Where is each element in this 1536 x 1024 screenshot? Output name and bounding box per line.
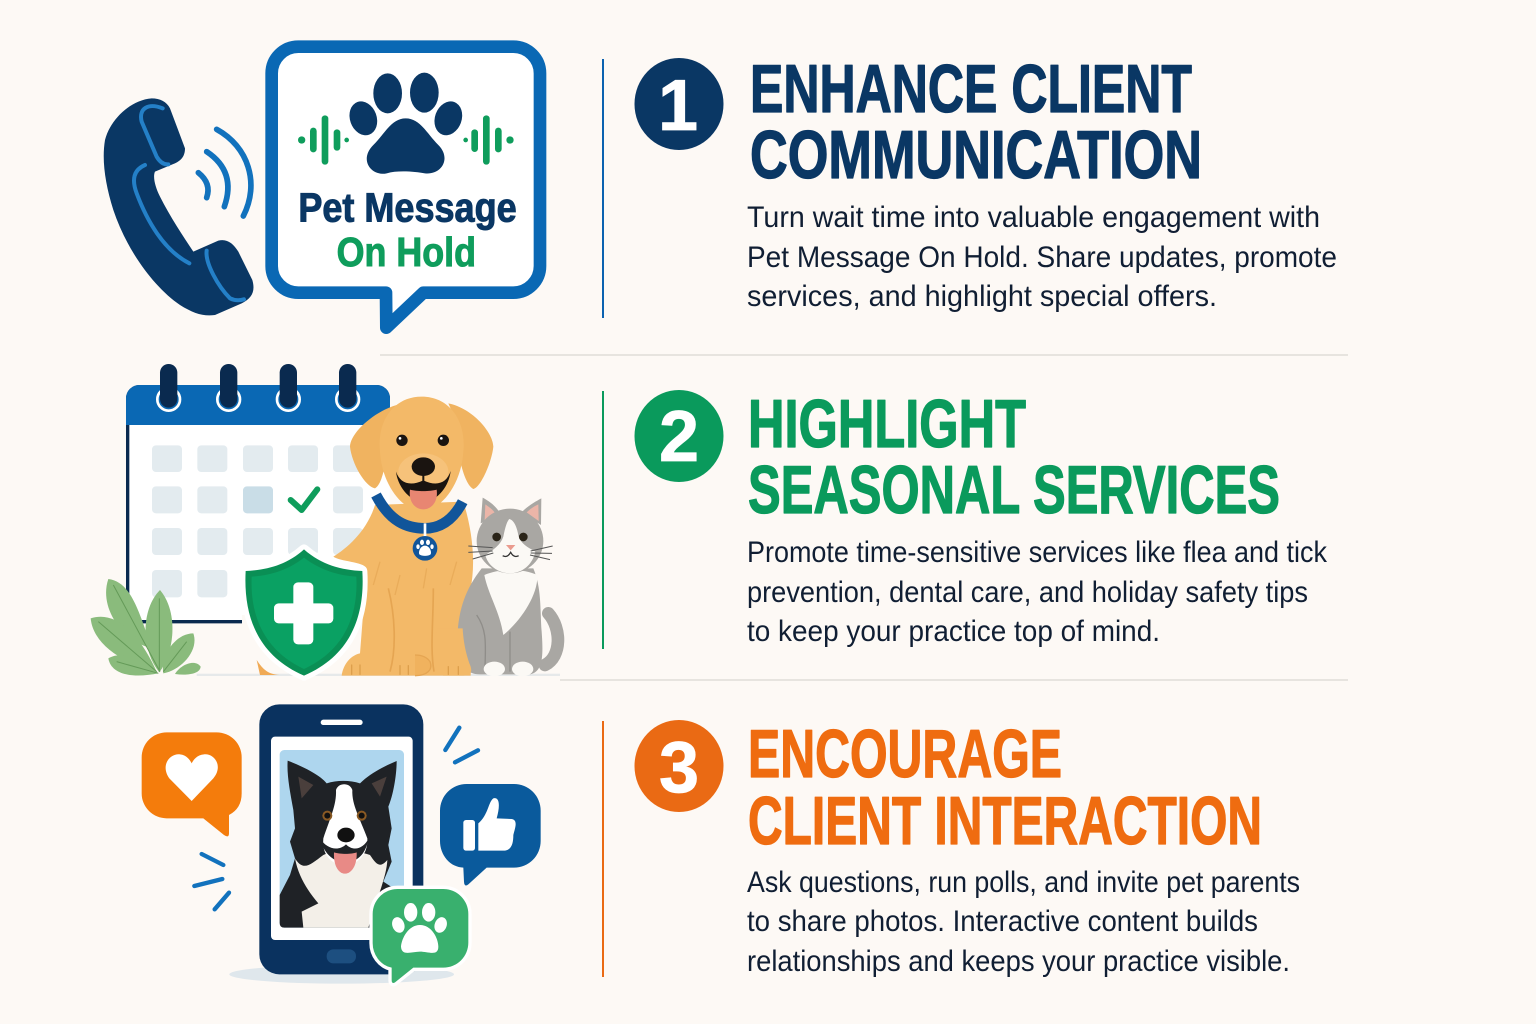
bubble label <box>298 185 517 275</box>
icon: orange heart bubble <box>142 732 242 836</box>
heading 2 <box>748 386 1280 528</box>
dog photo <box>280 750 404 928</box>
illustration: golden retriever <box>257 397 493 676</box>
body text 1: Turn wait time into valuable engagement with <box>747 201 1320 234</box>
number badge 3 <box>634 720 724 812</box>
speech bubble <box>272 47 540 328</box>
bubble label: Pet Message <box>298 185 517 231</box>
body text 1: Pet Message On Hold. Share updates, promote <box>747 241 1337 274</box>
section 3: encourage client interaction <box>602 716 1300 978</box>
icon: medical shield <box>245 549 363 676</box>
body text 3: to share photos. Interactive content builds <box>747 905 1258 938</box>
heading 3: ENCOURAGE <box>748 716 1062 792</box>
illustration: cat <box>457 498 558 676</box>
icon: audio bars left and right <box>298 115 514 165</box>
icon: blue thumbs up bubble <box>440 784 541 886</box>
icon: motion dashes <box>194 728 478 909</box>
section 2: highlight seasonal services <box>602 386 1327 649</box>
illustration: calendar with dog, cat, shield and plant <box>91 364 560 676</box>
illustration: dog front paw <box>434 628 471 676</box>
bubble label: On Hold <box>337 229 476 275</box>
heading 3 <box>748 716 1262 859</box>
body text 3: Ask questions, run polls, and invite pet parents <box>747 866 1300 899</box>
number badge 2: 2 <box>659 397 699 477</box>
heading 2: SEASONAL SERVICES <box>748 452 1280 528</box>
body text 2: prevention, dental care, and holiday safety tips <box>747 576 1308 609</box>
heading 1 <box>750 51 1202 193</box>
body text 3 <box>747 866 1300 978</box>
heading 3: CLIENT INTERACTION <box>748 783 1262 859</box>
calendar <box>126 364 392 625</box>
heading 1: ENHANCE CLIENT <box>750 51 1192 127</box>
icon: telephone handset <box>104 98 253 315</box>
icon: paw print <box>345 73 467 174</box>
heading 1: COMMUNICATION <box>750 117 1202 193</box>
smartphone <box>259 704 423 974</box>
body text 1: services, and highlight special offers. <box>747 280 1217 313</box>
body text 2: to keep your practice top of mind. <box>747 615 1160 648</box>
body text 3: relationships and keeps your practice visible. <box>747 945 1290 978</box>
icon: green paw bubble <box>373 889 468 983</box>
number badge 1: 1 <box>658 66 698 146</box>
illustration: smartphone with dog photo and reaction bubbles <box>142 704 541 984</box>
phone shadow <box>229 965 454 984</box>
number badge 2 <box>634 390 724 482</box>
icon: green plant <box>91 579 201 675</box>
number badge 1 <box>634 58 724 150</box>
section 1: enhance client communication <box>602 51 1337 318</box>
body text 2: Promote time-sensitive services like flea and tick <box>747 536 1327 569</box>
body text 2 <box>747 536 1327 648</box>
number badge 3: 3 <box>659 728 699 808</box>
icon: sound waves <box>198 129 251 216</box>
ground line <box>197 674 560 676</box>
illustration: phone and Pet Message On Hold bubble <box>104 47 540 328</box>
body text 1 <box>747 201 1337 313</box>
heading 2: HIGHLIGHT <box>748 386 1026 462</box>
